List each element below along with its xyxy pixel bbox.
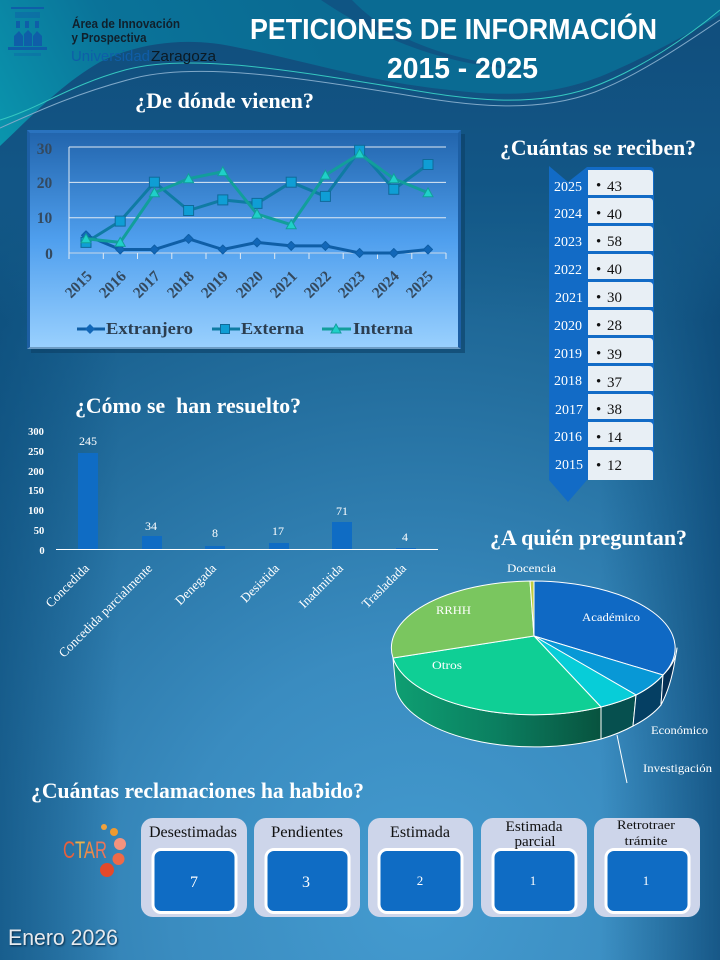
row 2019: 39 (607, 347, 622, 363)
legend: Externa (241, 319, 305, 338)
x axis labels: 2024 (369, 268, 403, 302)
row 2020: 2020 (554, 319, 582, 334)
slice: Otros (393, 636, 601, 715)
pie labels: Docencia (507, 563, 556, 575)
logo: CTAR (63, 824, 126, 877)
card: Desestimadas (141, 818, 247, 917)
x axis labels: 2017 (130, 268, 164, 302)
leader line (617, 735, 627, 783)
bar chart (28, 427, 438, 660)
row 2025: 2025 (554, 180, 582, 195)
row 2025: • (596, 178, 601, 194)
row 2024 (554, 198, 653, 223)
pie labels: Económico (651, 725, 708, 737)
legend (77, 319, 414, 338)
side: Investigacion (601, 695, 636, 739)
data labels: 17 (272, 524, 284, 538)
row 2019: 2019 (554, 347, 582, 362)
row 2015: 12 (607, 458, 622, 474)
card: Estimada parcial: Estimada (506, 819, 563, 835)
date: Enero 2026: Enero 2026 (8, 925, 118, 950)
row 2016 (554, 422, 653, 447)
row 2020: • (596, 318, 601, 334)
series: Externa (86, 150, 428, 242)
pie labels: Investigación (643, 763, 712, 775)
y axis labels: 30 (37, 141, 52, 158)
row 2022: • (596, 262, 601, 278)
title: PETICIONES DE INFORMACIÓN (250, 12, 657, 46)
pie labels: Académico (582, 612, 640, 624)
row 2016: • (596, 430, 601, 446)
card: Retrotraer tramite (594, 817, 700, 917)
slice: RRHH (391, 581, 534, 658)
x axis labels: 2023 (335, 268, 369, 302)
row 2019 (554, 338, 653, 363)
y axis labels (37, 141, 53, 263)
pie labels: Otros (432, 660, 463, 672)
x axis labels: 2022 (301, 268, 335, 302)
card: Desestimadas: Desestimadas (149, 824, 237, 841)
row 2017 (555, 394, 653, 419)
row 2023: • (596, 234, 601, 250)
legend: Extranjero (106, 319, 193, 338)
title (250, 12, 657, 85)
y axis ticks: 0 (39, 546, 45, 557)
card: Estimada parcial (481, 818, 587, 917)
row 2016: 2016 (554, 430, 582, 445)
x axis labels: 2025 (403, 268, 437, 302)
x axis labels: 2021 (267, 268, 301, 302)
card: Desestimadas: 7 (190, 874, 198, 891)
y axis ticks (28, 427, 45, 557)
card: Pendientes: 3 (302, 874, 310, 891)
row 2023: 58 (607, 234, 622, 250)
legend: Interna (353, 319, 414, 338)
series: Interna (86, 154, 428, 242)
data labels: 4 (402, 530, 408, 544)
heading: cuantas se reciben: ¿Cuántas se reciben? (500, 135, 696, 160)
row 2018: 37 (607, 375, 622, 391)
side: Economico (633, 675, 663, 726)
row 2022: 2022 (554, 263, 582, 278)
category labels: Trasladada (359, 560, 409, 611)
row 2022 (554, 254, 653, 279)
heading: a quien preguntan: ¿A quién preguntan? (490, 525, 687, 550)
slice: Economico (534, 636, 663, 695)
category labels: Concedida (42, 560, 92, 610)
card: Estimada: Estimada (390, 824, 450, 841)
row 2021: 30 (607, 290, 622, 306)
pie labels (432, 563, 712, 775)
slice: Academico (534, 581, 675, 675)
heading: de donde vienen: ¿De dónde vienen? (135, 88, 314, 113)
title: 2015 - 2025 (387, 53, 538, 85)
row 2018 (554, 366, 653, 391)
pie chart (391, 581, 677, 783)
row 2019: • (596, 346, 601, 362)
logo text: Área de Innovación: Zaragoza (151, 48, 217, 65)
data labels: 8 (212, 526, 218, 540)
category labels: Denegada (172, 560, 219, 608)
x axis labels: 2016 (96, 268, 130, 302)
card: Estimada: 2 (417, 873, 423, 888)
row 2020 (554, 310, 653, 335)
category labels: Inadmitida (296, 560, 346, 611)
row 2021: • (596, 290, 601, 306)
y axis labels: 20 (37, 175, 52, 192)
line chart panel (27, 130, 465, 353)
side: Academico (661, 648, 677, 705)
row 2024: 40 (607, 207, 622, 223)
card: Retrotraer tramite: Retrotraer (617, 817, 676, 832)
series: Extranjero (86, 235, 428, 253)
pie labels: RRHH (436, 605, 471, 617)
row 2023 (554, 226, 653, 251)
x axis labels: 2020 (233, 268, 267, 302)
row 2016: 14 (607, 430, 622, 446)
data labels: 34 (145, 519, 157, 533)
row 2018: 2018 (554, 374, 582, 389)
logo: Universidad de Zaragoza (8, 7, 47, 56)
row 2017: 38 (607, 402, 622, 418)
logo text: Área de Innovación: Área de Innovación (72, 16, 180, 31)
row 2017: • (596, 402, 601, 418)
y axis ticks: 250 (28, 447, 44, 458)
x axis labels: 2018 (164, 268, 198, 302)
row 2021 (555, 282, 653, 307)
data labels: 245 (79, 434, 97, 448)
row 2020: 28 (607, 318, 622, 334)
row 2025: 43 (607, 179, 622, 195)
row 2018: • (596, 374, 601, 390)
y axis labels: 10 (37, 210, 52, 227)
y axis ticks: 50 (34, 526, 44, 537)
row 2015: 2015 (555, 458, 583, 473)
heading: como se han resuelto: ¿Cómo se han resuelto? (75, 393, 301, 418)
x axis labels (62, 268, 437, 302)
logo: CTAR: CTAR (63, 837, 107, 864)
x axis labels: 2015 (62, 268, 96, 302)
data labels (79, 434, 408, 544)
y axis labels: 0 (45, 246, 53, 263)
slice: Docencia (530, 581, 534, 636)
y axis ticks: 200 (28, 467, 44, 478)
category labels: Desistida (237, 560, 282, 605)
heading: reclamaciones: ¿Cuántas reclamaciones ha habido? (31, 778, 364, 803)
row 2017: 2017 (555, 403, 583, 418)
card: Estimada parcial: 1 (530, 873, 536, 888)
slice: Investigacion (534, 636, 636, 707)
y axis ticks: 150 (28, 486, 44, 497)
card: Retrotraer tramite: trámite (624, 833, 668, 848)
row 2015 (555, 450, 653, 480)
row 2023: 2023 (554, 235, 582, 250)
row 2025 (554, 170, 653, 195)
y axis ticks: 100 (28, 506, 44, 517)
category labels: Concedida parcialmente (55, 560, 155, 660)
logo text: Área de Innovación: Universidad (71, 48, 150, 65)
y axis ticks: 300 (28, 427, 44, 438)
card: Estimada parcial: parcial (514, 834, 556, 850)
logo text: Área de Innovación: y Prospectiva (72, 31, 147, 45)
year list (549, 166, 654, 502)
row 2024: 2024 (554, 207, 582, 222)
card: Pendientes (254, 818, 360, 917)
card: Retrotraer tramite: 1 (643, 873, 649, 888)
card: Pendientes: Pendientes (271, 824, 343, 841)
x axis labels: 2019 (198, 268, 232, 302)
row 2024: • (596, 206, 601, 222)
data labels: 71 (336, 504, 348, 518)
row 2015: • (596, 458, 601, 474)
category labels (42, 560, 409, 660)
side: Otros (393, 658, 601, 747)
row 2021: 2021 (555, 291, 583, 306)
logo text: Área de Innovación (71, 16, 217, 65)
row 2022: 40 (607, 262, 622, 278)
bars (78, 453, 416, 549)
card: Estimada (368, 818, 473, 917)
